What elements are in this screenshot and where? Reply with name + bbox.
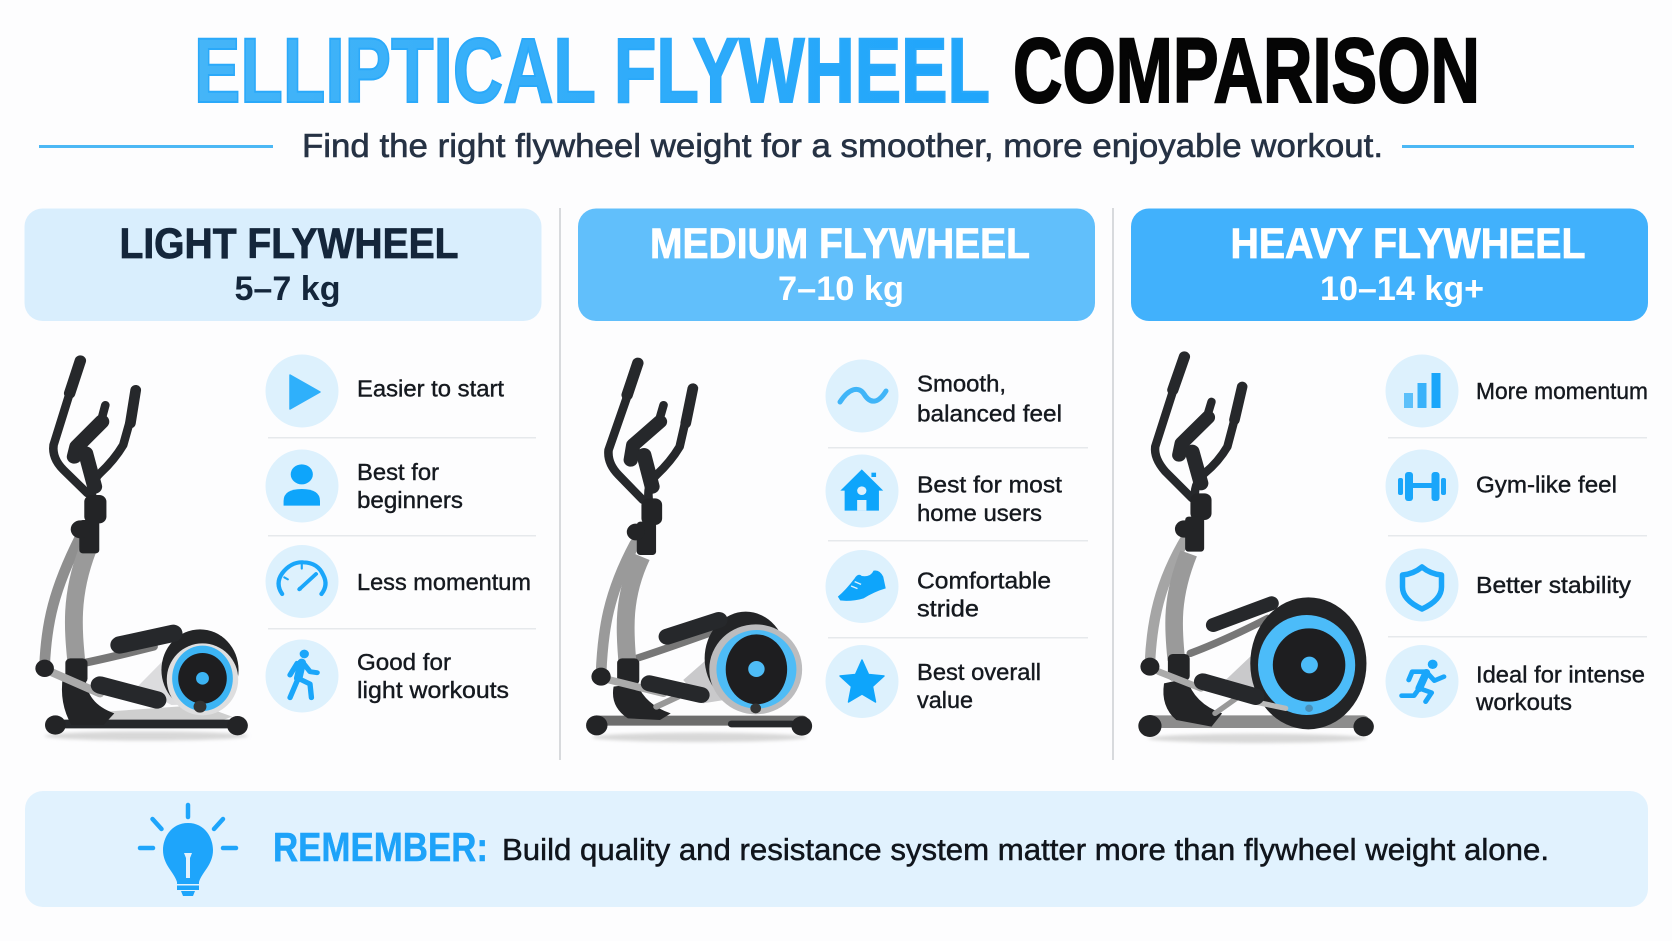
feature: smooth, balanced feel (826, 360, 1062, 432)
feature: more momentum: More momentum (1476, 378, 1648, 404)
icon: shoe (838, 570, 886, 602)
panel: light flywheel (24, 208, 542, 741)
header: medium flywheel: MEDIUM FLYWHEEL (650, 220, 1030, 268)
icon: light bulb (140, 805, 236, 896)
feature: best for most home users: home users (917, 500, 1042, 526)
callout: remember (25, 791, 1648, 907)
header: light flywheel (24, 208, 542, 321)
icon: play (290, 375, 320, 409)
icon: dumbbell (1398, 472, 1446, 501)
feature: good for light workouts: light workouts (357, 677, 509, 703)
feature: best overall value: value (917, 687, 973, 713)
feature: ideal for intense workouts: workouts (1475, 689, 1572, 715)
icon: gauge (279, 562, 326, 594)
feature: comfortable stride: Comfortable (917, 568, 1051, 594)
elliptical illustration: heavy (1138, 357, 1374, 743)
icon: shield (1402, 567, 1442, 609)
callout: remember: REMEMBER: (273, 824, 488, 870)
feature: best for most home users (826, 454, 1063, 528)
header: heavy flywheel (1131, 208, 1648, 321)
panel: heavy flywheel (1131, 208, 1648, 743)
feature: good for light workouts: Good for (357, 649, 451, 675)
feature: gym-like feel: Gym-like feel (1476, 472, 1617, 498)
feature: smooth, balanced feel: balanced feel (917, 400, 1062, 426)
feature: best for beginners: beginners (357, 487, 463, 513)
icon: house (840, 469, 883, 511)
feature: ideal for intense workouts: Ideal for intense (1476, 662, 1645, 688)
icon: bars (1404, 373, 1440, 408)
feature: better stability: Better stability (1476, 572, 1632, 598)
title dark word: COMPARISON (1013, 20, 1480, 122)
elliptical illustration: light (35, 361, 248, 741)
header: medium flywheel (578, 208, 1095, 321)
icon: star (840, 660, 884, 702)
feature: best overall value: Best overall (917, 659, 1041, 685)
feature: best for beginners (266, 450, 463, 522)
subtitle (39, 127, 1634, 164)
feature: easier to start (266, 354, 505, 428)
header: medium flywheel: 7–10 kg (778, 270, 904, 308)
feature: smooth, balanced feel: Smooth, (917, 370, 1006, 396)
feature: comfortable stride: stride (917, 596, 979, 622)
icon: walker (290, 650, 317, 698)
feature: better stability (1386, 548, 1632, 622)
feature: more momentum (1386, 354, 1648, 428)
feature: good for light workouts (266, 640, 509, 712)
header: heavy flywheel: 10–14 kg+ (1320, 270, 1484, 308)
feature: easier to start: Easier to start (357, 376, 505, 402)
icon: runner (1402, 660, 1444, 702)
header: light flywheel: 5–7 kg (234, 270, 340, 308)
feature: best for most home users: Best for most (917, 472, 1063, 498)
feature: less momentum: Less momentum (357, 569, 531, 595)
icon: wave (840, 389, 886, 402)
feature: ideal for intense workouts (1386, 645, 1645, 718)
feature: gym-like feel (1386, 450, 1617, 522)
elliptical illustration: medium (586, 363, 812, 742)
feature: less momentum (266, 545, 531, 618)
icon: person (284, 464, 320, 506)
subtitle: Find the right flywheel weight for a smoother, more enjoyable workout. (302, 127, 1383, 164)
title: ELLIPTICAL FLYWHEEL (194, 20, 990, 122)
feature: best for beginners: Best for (357, 459, 439, 485)
header: heavy flywheel: HEAVY FLYWHEEL (1230, 220, 1586, 268)
header: light flywheel: LIGHT FLYWHEEL (120, 220, 458, 268)
callout: remember: Build quality and resistance system matter more than flywheel weight alone. (502, 832, 1549, 867)
panel: medium flywheel (578, 208, 1095, 742)
feature: best overall value (826, 645, 1041, 718)
feature: comfortable stride (826, 550, 1051, 623)
